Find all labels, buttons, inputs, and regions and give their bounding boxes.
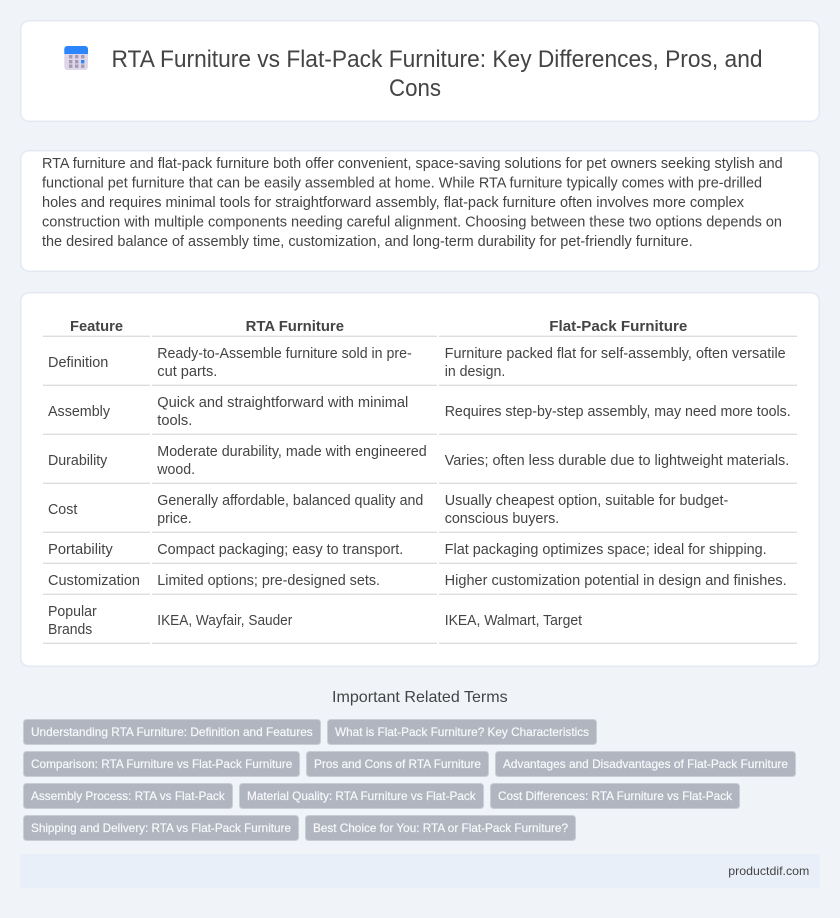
tag: comparison: Comparison: RTA Furniture vs Flat-Pack Furniture: [31, 757, 293, 771]
table header row: [70, 319, 687, 335]
table row: portability: Flat packaging optimizes space; ideal for shipping.: [445, 542, 767, 558]
tag: what is flat-pack furniture: [328, 720, 596, 744]
table row: durability: Moderate durability, made with engineered: [157, 444, 427, 460]
table row: durability: [48, 444, 789, 478]
tag: advantages and disadvantages: [496, 752, 796, 776]
table row: assembly: Quick and straightforward with minimal: [157, 395, 408, 411]
table row: popular brands: IKEA, Wayfair, Sauder: [157, 613, 292, 629]
table row: definition: in design.: [445, 364, 505, 380]
table header row: Feature: [70, 319, 123, 335]
table row: definition: [48, 346, 786, 380]
table row: durability: Varies; often less durable due to lightweight materials.: [445, 453, 789, 469]
tag: pros and cons: Pros and Cons of RTA Furniture: [314, 757, 481, 771]
table row: definition: cut parts.: [157, 364, 217, 380]
table row: popular brands: Brands: [48, 622, 92, 638]
table row: definition: Definition: [48, 355, 108, 371]
title: Cons: [389, 75, 441, 102]
text block: introduction paragraph: the desired balance of assembly time, customization, and long-term durability for pet-friendly furniture.: [42, 234, 693, 250]
table row: customization: Limited options; pre-designed sets.: [157, 573, 380, 589]
table row: popular brands: Popular: [48, 604, 97, 620]
heading: important related terms: Important Related Terms: [332, 689, 508, 706]
table row: cost: Cost: [48, 502, 77, 518]
tag: pros and cons: [306, 752, 488, 776]
tag: shipping and delivery: Shipping and Delivery: RTA vs Flat-Pack Furniture: [31, 821, 291, 835]
text block: introduction paragraph: RTA furniture and flat-pack furniture both offer convenient, space-saving solutions for pet owners seeking stylish and: [42, 156, 783, 172]
related terms tags: [24, 720, 796, 840]
table row: durability: wood.: [156, 462, 195, 478]
footer: [20, 854, 820, 888]
text block: introduction paragraph: construction with multiple components needing careful alignment. Choosing between these two options depends on: [42, 214, 782, 230]
tag: assembly process: Assembly Process: RTA vs Flat-Pack: [31, 789, 226, 803]
tag: cost differences: Cost Differences: RTA Furniture vs Flat-Pack: [498, 789, 733, 803]
table row: cost: conscious buyers.: [445, 511, 559, 527]
table row: cost: price.: [157, 511, 192, 527]
text block: introduction paragraph: holes and requires minimal tools for straightforward assembly, flat-pack furniture often involves more complex: [42, 195, 745, 211]
table row: durability: Durability: [48, 453, 108, 469]
panel: introduction: [21, 151, 819, 271]
table row: definition: Furniture packed flat for self-assembly, often versatile: [445, 346, 786, 362]
table row: portability: [48, 542, 767, 558]
tag: comparison: [24, 752, 300, 776]
tag: shipping and delivery: [24, 816, 298, 840]
table row: cost: Usually cheapest option, suitable for budget-: [445, 493, 728, 509]
table row: assembly: Assembly: [48, 404, 111, 420]
table row: cost: [48, 493, 728, 527]
table row: customization: [48, 573, 787, 589]
table row: customization: Higher customization potential in design and finishes.: [445, 573, 787, 589]
table row: cost: Generally affordable, balanced quality and: [157, 493, 423, 509]
table row: portability: Portability: [48, 542, 114, 558]
text block: introduction paragraph: functional pet furniture that can be easily assembled at home. While RTA furniture typically comes with pre-drilled: [42, 176, 762, 192]
table row: customization: Customization: [48, 573, 140, 589]
table header row: RTA Furniture: [246, 319, 344, 335]
panel: comparison table: [21, 293, 819, 666]
table row: assembly: [48, 395, 791, 429]
tag: cost differences: [490, 784, 740, 808]
table row: portability: Compact packaging; easy to transport.: [157, 542, 403, 558]
tag: best choice: Best Choice for You: RTA or Flat-Pack Furniture?: [313, 821, 568, 835]
tag: understanding RTA furniture: [24, 720, 320, 744]
text block: introduction paragraph: [42, 156, 783, 250]
panel: header: [21, 21, 819, 121]
tag: material quality: [240, 784, 484, 808]
tag: best choice: [306, 816, 576, 840]
table row: assembly: tools.: [157, 413, 192, 429]
footer: productdif.com: [728, 864, 809, 878]
table row: popular brands: [48, 604, 582, 638]
table header row: Flat-Pack Furniture: [549, 319, 687, 335]
tag: advantages and disadvantages: Advantages and Disadvantages of Flat-Pack Furniture: [503, 757, 788, 771]
tag: material quality: Material Quality: RTA Furniture vs Flat-Pack: [247, 789, 477, 803]
tag: what is flat-pack furniture: What is Flat-Pack Furniture? Key Characteristics: [335, 725, 589, 739]
table row: popular brands: IKEA, Walmart, Target: [445, 613, 582, 629]
title: [112, 46, 762, 102]
title: RTA Furniture vs Flat-Pack Furniture: Key Differences, Pros, and: [112, 46, 762, 73]
table row: definition: Ready-to-Assemble furniture sold in pre-: [157, 346, 412, 362]
tag: understanding RTA furniture: Understanding RTA Furniture: Definition and Features: [31, 725, 313, 739]
tag: assembly process: [24, 784, 232, 808]
table row: assembly: Requires step-by-step assembly, may need more tools.: [445, 404, 791, 420]
icon: calendar: [64, 46, 88, 70]
